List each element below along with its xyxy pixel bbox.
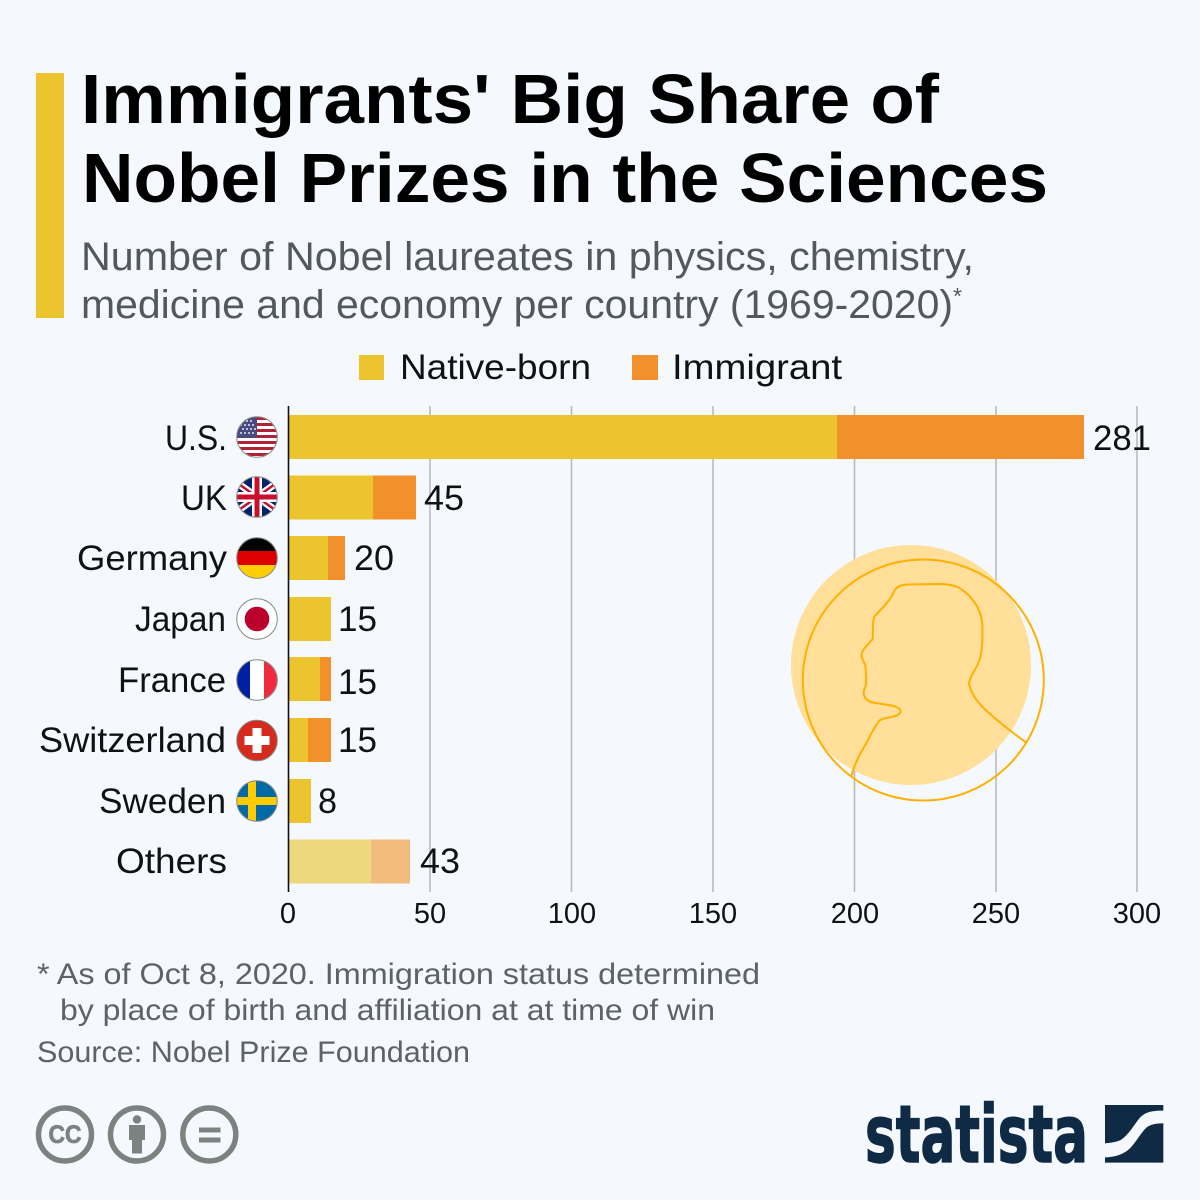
icon: Japan flag [237, 599, 277, 639]
country labels: Germany [77, 539, 228, 578]
title accent bar [36, 73, 64, 318]
country labels: France [118, 661, 226, 700]
bar chart [288, 415, 1084, 884]
value labels: 15 [338, 663, 377, 702]
country labels: U.S. [165, 419, 227, 458]
x axis labels [280, 898, 1161, 930]
subtitle: medicine and economy per country (1969-2020) [81, 283, 953, 327]
legend: Native-born [400, 348, 591, 387]
x axis labels: 250 [972, 898, 1020, 930]
country labels: Sweden [99, 782, 226, 821]
bar: UK [288, 476, 416, 520]
chart grid lines [430, 406, 1137, 892]
country labels: UK [181, 479, 227, 518]
statista logo: statista [865, 1089, 1088, 1181]
icon: UK flag [236, 476, 278, 518]
icon: creative commons licence: CC [48, 1121, 82, 1149]
footnote: * As of Oct 8, 2020. Immigration status determined [37, 958, 760, 991]
icon: France flag [236, 659, 278, 701]
x axis labels: 100 [548, 898, 596, 930]
title [81, 60, 1048, 217]
footnote [37, 958, 760, 1027]
country labels [39, 419, 228, 881]
x axis labels: 300 [1113, 898, 1161, 930]
x axis labels: 150 [689, 898, 737, 930]
value labels: 281 [1093, 419, 1151, 458]
subtitle [81, 235, 974, 327]
icon: Sweden flag [236, 780, 278, 822]
legend: Immigrant [672, 348, 842, 387]
value labels: 8 [318, 782, 337, 821]
bar: Switzerland [288, 718, 331, 762]
illustration: nobel medal [791, 545, 1044, 800]
x axis labels: 0 [280, 898, 296, 930]
bar: Others [288, 840, 410, 884]
x axis labels: 200 [831, 898, 879, 930]
footnote: by place of birth and affiliation at at time of win [60, 994, 715, 1027]
source: Source: Nobel Prize Foundation [37, 1036, 470, 1069]
x axis labels: 50 [414, 898, 446, 930]
country labels: Switzerland [39, 721, 226, 760]
bar: Sweden [288, 779, 311, 823]
axis line [288, 406, 290, 892]
value labels: 45 [424, 479, 464, 518]
country labels: Others [116, 842, 227, 881]
icon: US flag [236, 416, 278, 458]
value labels: 20 [354, 539, 394, 578]
value labels: 15 [338, 721, 377, 760]
bar: Japan [288, 597, 331, 641]
title: Immigrants' Big Share of [81, 60, 940, 138]
value labels [318, 419, 1151, 881]
legend [359, 348, 842, 387]
icon: creative commons licence [38, 1108, 236, 1161]
icon: Switzerland flag [237, 720, 277, 761]
icon: Germany flag [236, 537, 278, 580]
title: Nobel Prizes in the Sciences [82, 139, 1048, 217]
value labels: 43 [420, 842, 460, 881]
country labels: Japan [135, 600, 226, 639]
bar: U.S. [288, 415, 1084, 459]
subtitle: * [953, 283, 962, 309]
subtitle: Number of Nobel laureates in physics, chemistry, [81, 235, 974, 279]
value labels: 15 [338, 600, 377, 639]
bar: France [288, 657, 331, 701]
bar: Germany [288, 536, 345, 580]
